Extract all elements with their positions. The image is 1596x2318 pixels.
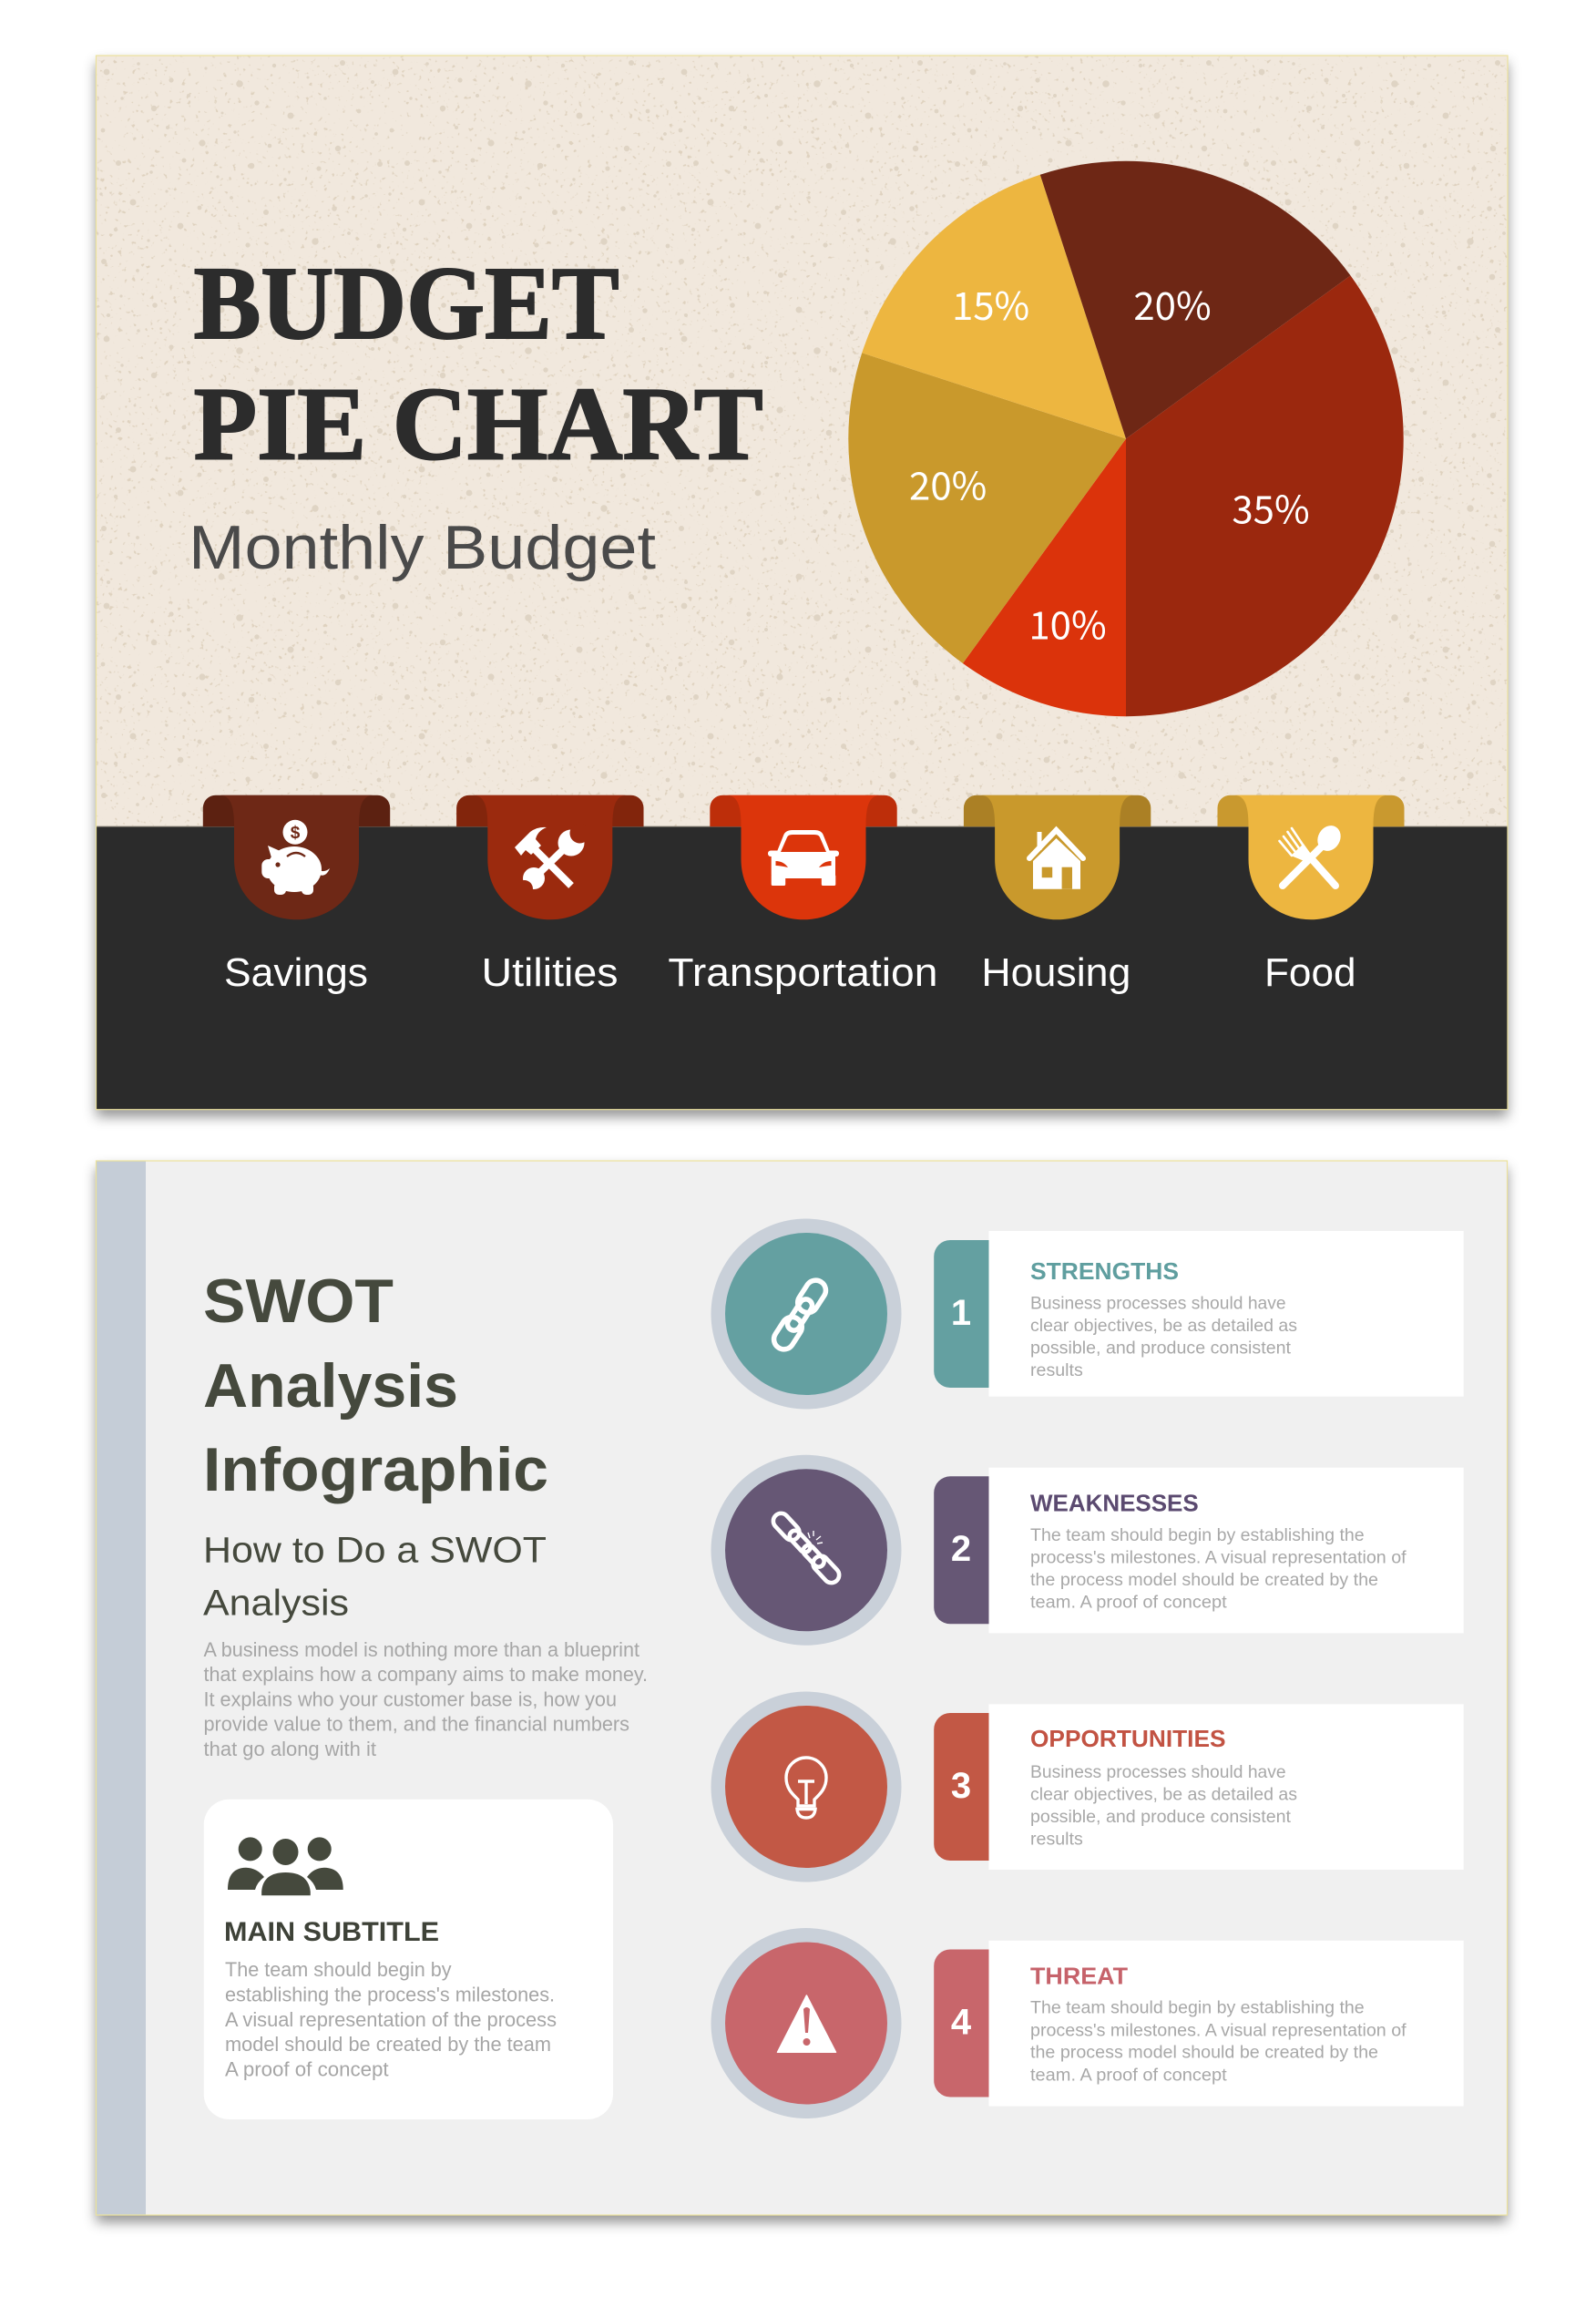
text card: threat: process's milestones. A visual representation of (1030, 2020, 1407, 2040)
heading: swot analysis infographic: Analysis (203, 1351, 458, 1421)
sidebar strip (97, 1161, 146, 2215)
title: budget pie chart: BUDGET (194, 245, 619, 361)
card text: model should be created by the team (225, 2033, 551, 2056)
icon: car (768, 830, 839, 886)
panel background (97, 56, 1508, 1110)
card text: establishing the process's milestones. (225, 1983, 555, 2005)
subtitle: monthly budget: Monthly Budget (189, 513, 656, 582)
ribbon: transportation (710, 795, 897, 919)
intro paragraph: that explains how a company aims to make money. (204, 1663, 648, 1686)
text card: opportunities (989, 1704, 1464, 1870)
label: housing: Housing (981, 950, 1130, 995)
icon: warning triangle (778, 1995, 836, 2052)
subheading: how to do a swot analysis (203, 1531, 547, 1624)
text card: weaknesses: The team should begin by establishing the (1030, 1525, 1365, 1545)
circle badge: opportunities (711, 1691, 902, 1882)
label: utilities: Utilities (481, 950, 618, 995)
card heading: MAIN SUBTITLE (224, 1917, 439, 1947)
title: budget pie chart (194, 245, 763, 481)
label: transportation: Transportation (668, 950, 937, 995)
panel background (97, 1161, 1507, 2215)
circle badge: strengths (711, 1219, 902, 1409)
number tab 2: 2 (951, 1529, 971, 1569)
label: food: Food (1264, 950, 1356, 995)
pie chart: 10% (1028, 596, 1107, 651)
label: savings: Savings (224, 950, 368, 995)
text card: opportunities: Business processes should have (1030, 1762, 1286, 1782)
dark footer band (97, 826, 1508, 1110)
text card: threat: The team should begin by establishing the (1030, 1997, 1365, 2017)
intro paragraph: that go along with it (204, 1738, 376, 1760)
pie chart (848, 161, 1404, 716)
icon: fork and spoon (1279, 821, 1345, 886)
subheading: how to do a swot analysis: Analysis (203, 1584, 349, 1624)
heading: swot analysis infographic: Infographic (203, 1435, 548, 1504)
title: budget pie chart: PIE CHART (194, 366, 763, 481)
number tab 2 (934, 1476, 989, 1624)
pie chart: 15% (952, 276, 1029, 332)
card text: A proof of concept (225, 2058, 389, 2081)
icon: light bulb (786, 1758, 826, 1818)
text card: weaknesses: process's milestones. A visual representation of (1030, 1548, 1407, 1568)
number tab 4 (934, 1950, 989, 2097)
icon: house (1029, 830, 1083, 889)
pie chart: 35% (1232, 479, 1310, 536)
card text: A visual representation of the process (225, 2008, 557, 2031)
ribbon: housing (964, 795, 1151, 919)
circle badge: threat (711, 1928, 902, 2118)
text card: weaknesses (989, 1468, 1464, 1633)
text card: threat: THREAT (1030, 1962, 1128, 1989)
heading: swot analysis infographic (203, 1267, 548, 1504)
number tab 1 (934, 1240, 989, 1388)
ribbon: utilities (456, 795, 643, 919)
text card: weaknesses: the process model should be created by the (1030, 1570, 1378, 1590)
text card: strengths: clear objectives, be as detailed as (1030, 1316, 1297, 1336)
text card: weaknesses: team. A proof of concept (1030, 1592, 1227, 1612)
text card: strengths: Business processes should have (1030, 1294, 1286, 1314)
row: strengths (711, 1219, 1464, 1409)
number tab 3: 3 (951, 1766, 971, 1806)
icon: chain link (770, 1277, 830, 1353)
intro paragraph (204, 1638, 648, 1760)
number tab 3 (934, 1713, 989, 1861)
panel: swot analysis (97, 1161, 1507, 2215)
card text (225, 1958, 557, 2081)
text card: strengths: results (1030, 1360, 1083, 1380)
text card: threat (989, 1941, 1464, 2107)
text card: opportunities: possible, and produce consistent (1030, 1807, 1292, 1827)
panel: budget pie chart (97, 56, 1508, 1110)
text card: threat: team. A proof of concept (1030, 2065, 1227, 2085)
subheading: how to do a swot analysis: How to Do a SWOT (203, 1531, 547, 1571)
circle badge: weaknesses (711, 1455, 902, 1646)
number tab 1: 1 (951, 1293, 971, 1333)
icon: piggy bank: $ (291, 824, 301, 843)
card: main subtitle (204, 1800, 613, 2119)
icon: broken chain (770, 1510, 843, 1586)
icon: hammer and wrench (515, 824, 590, 897)
row: weaknesses (711, 1455, 1464, 1646)
ribbon: savings (203, 795, 390, 919)
text card: opportunities: OPPORTUNITIES (1030, 1725, 1226, 1752)
intro paragraph: It explains who your customer base is, how you (204, 1687, 617, 1710)
pie chart: 20% (909, 456, 987, 512)
row: threat (711, 1928, 1464, 2118)
text card: weaknesses: WEAKNESSES (1030, 1489, 1199, 1516)
card text: The team should begin by (225, 1958, 452, 1981)
text card: opportunities: results (1030, 1829, 1083, 1849)
row: opportunities (711, 1691, 1464, 1882)
text card: threat: the process model should be created by the (1030, 2043, 1378, 2063)
heading: swot analysis infographic: SWOT (203, 1267, 394, 1336)
ribbon: food (1217, 795, 1405, 919)
text card: strengths (989, 1231, 1464, 1397)
intro paragraph: A business model is nothing more than a blueprint (204, 1638, 639, 1661)
text card: opportunities: clear objectives, be as detailed as (1030, 1785, 1297, 1805)
icon: people group (228, 1837, 343, 1896)
icon: piggy bank (261, 820, 330, 895)
text card: strengths: STRENGTHS (1030, 1257, 1179, 1285)
intro paragraph: provide value to them, and the financial numbers (204, 1713, 629, 1736)
text card: strengths: possible, and produce consistent (1030, 1338, 1292, 1359)
number tab 4: 4 (951, 2002, 972, 2042)
pie chart: 20% (1133, 276, 1212, 332)
